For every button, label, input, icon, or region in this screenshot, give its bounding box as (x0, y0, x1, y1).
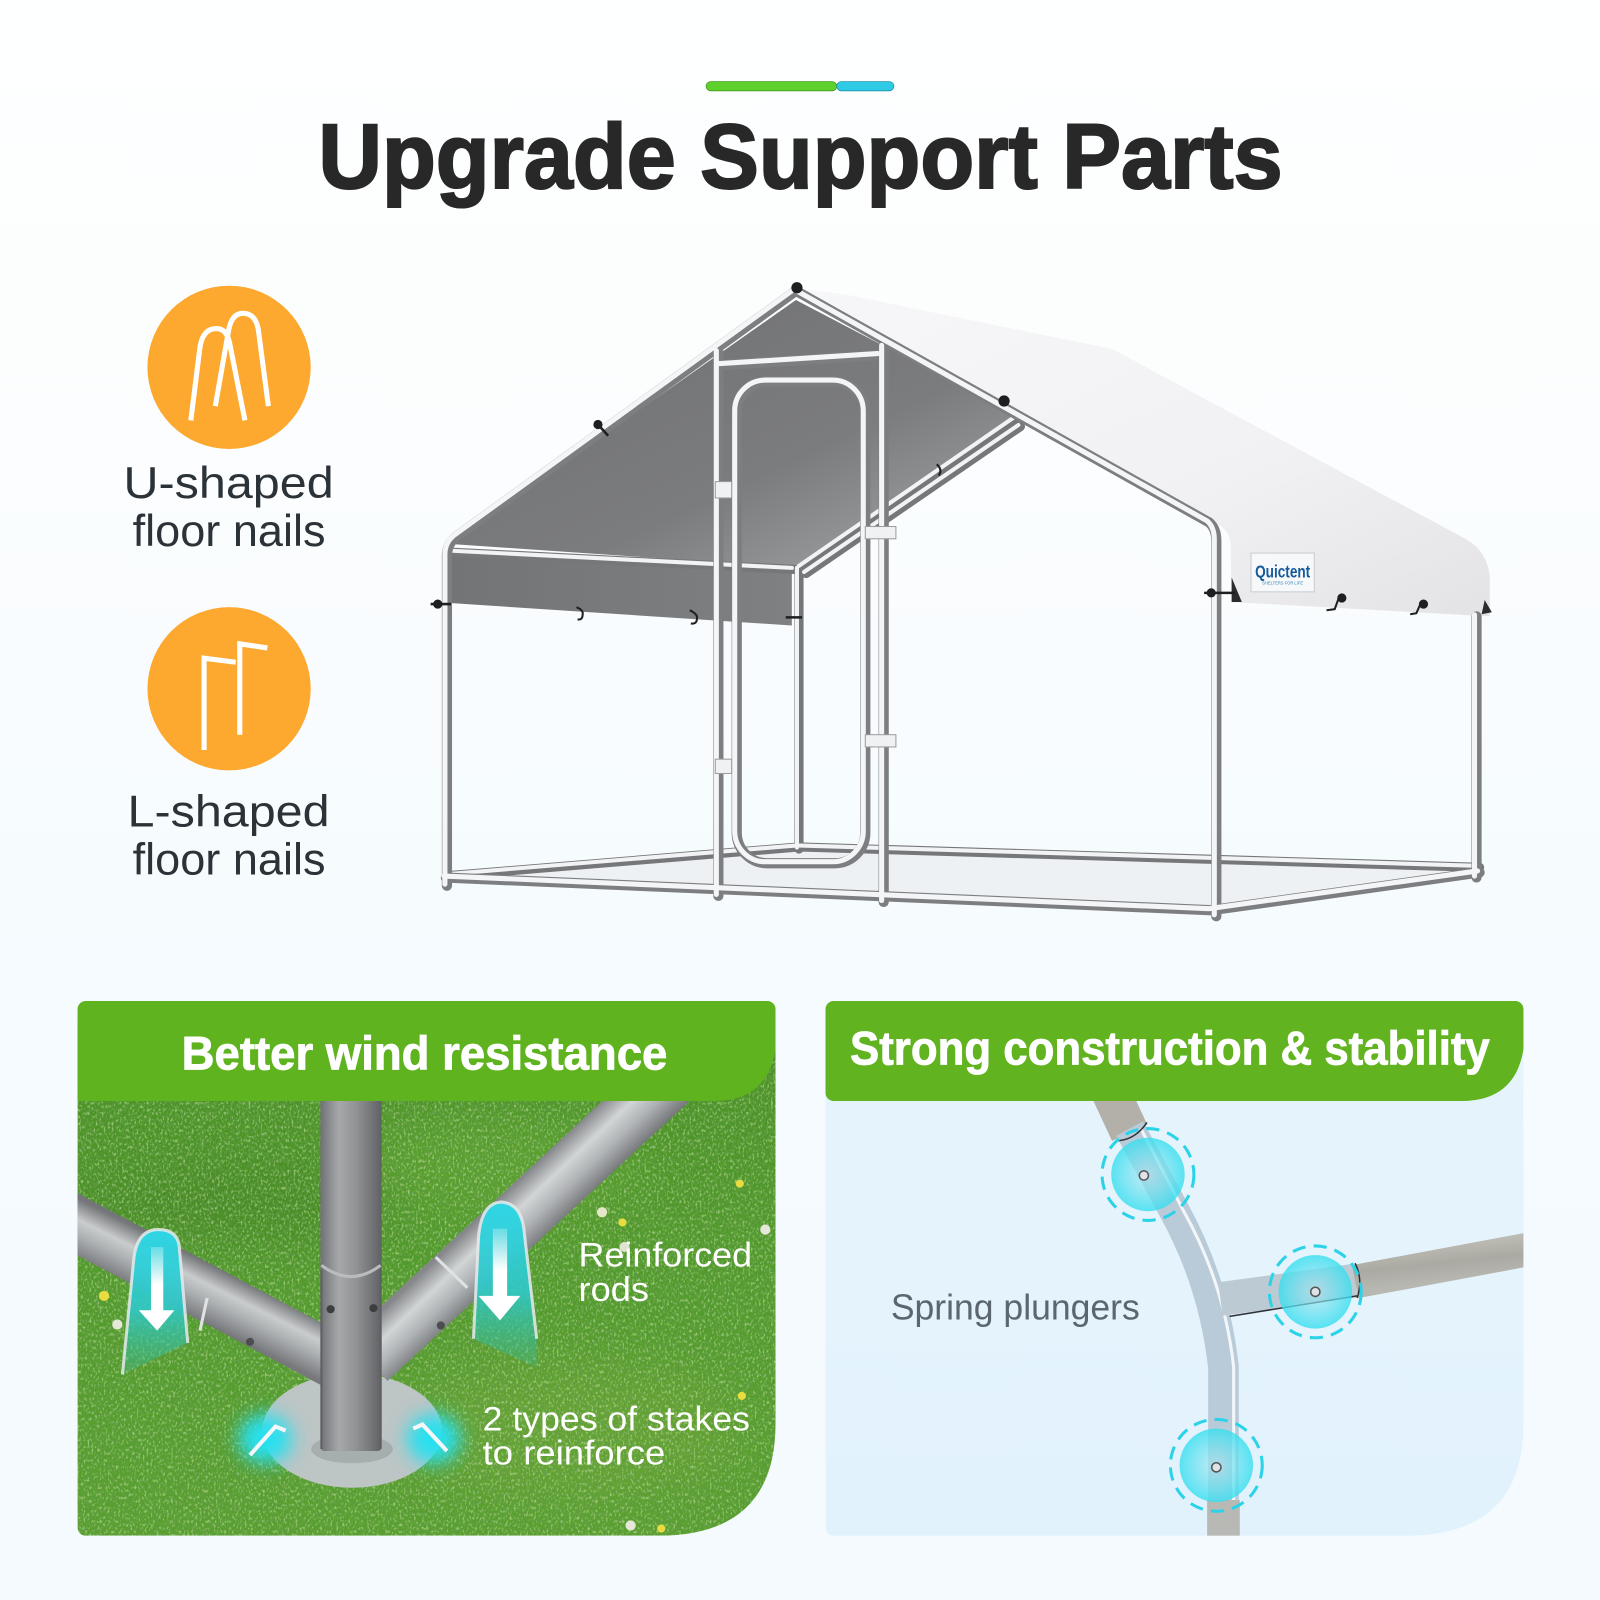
panel callout text (483, 1236, 752, 1472)
panel callout text: to reinforce (483, 1434, 665, 1472)
white roof (806, 290, 1490, 616)
label: L-shaped floor nails (128, 786, 330, 884)
green header (78, 1001, 776, 1101)
accent bar (706, 82, 894, 91)
chicken coop frame with canopy (431, 283, 1492, 916)
right marker (473, 1202, 537, 1367)
canopy underside (449, 300, 1018, 567)
panel: floor nail types (123, 286, 334, 884)
header text: Strong construction & stability (850, 1022, 1490, 1074)
grass photo (51, 1020, 776, 1536)
green header (826, 1001, 1523, 1101)
icon: U-shaped nails (147, 286, 311, 449)
label: L-shaped floor nails: L-shaped (128, 786, 330, 837)
panel callout text: 2 types of stakes (483, 1401, 750, 1439)
panel: better wind resistance (51, 1001, 776, 1536)
icon: L-shaped nails (147, 607, 311, 770)
header text: Better wind resistance (182, 1027, 667, 1079)
left rod (51, 1210, 337, 1362)
base plate (262, 1373, 442, 1488)
vertical pole (320, 1082, 382, 1451)
label: U-shaped floor nails (123, 457, 334, 556)
right rod (367, 1076, 673, 1359)
label: U-shaped floor nails: floor nails (133, 505, 326, 556)
panel callout text: rods (579, 1271, 649, 1309)
front frame tubes (444, 289, 1480, 916)
label: L-shaped floor nails: floor nails (133, 833, 326, 884)
spring plunger highlight bottom (1170, 1419, 1262, 1511)
back frame tubes (447, 418, 1480, 876)
brand label: SHELTERS FOR LIFE (1262, 581, 1303, 586)
door hinges and latches (715, 482, 896, 773)
title: Upgrade Support Parts (318, 106, 1283, 208)
ground flowers (99, 1180, 770, 1533)
floor (449, 849, 1480, 908)
brand label (1251, 553, 1314, 592)
frame joint photo (1102, 1087, 1531, 1541)
brand label: Quictent (1255, 562, 1310, 582)
spring plunger highlight right (1269, 1246, 1361, 1338)
black knobs and hooks (431, 283, 1428, 624)
spring plungers label: Spring plungers (891, 1287, 1140, 1327)
rod joints (200, 1257, 467, 1331)
stake glows (239, 1414, 460, 1463)
panel background (826, 1001, 1523, 1536)
label: U-shaped floor nails: U-shaped (123, 457, 334, 508)
roof corner flaps (1232, 578, 1492, 614)
panel callout text: Reinforced (579, 1236, 752, 1274)
spring plunger highlight top (1102, 1129, 1194, 1220)
canopy valance (450, 549, 792, 626)
panel: strong construction and stability (826, 1001, 1531, 1541)
left marker (122, 1230, 188, 1374)
